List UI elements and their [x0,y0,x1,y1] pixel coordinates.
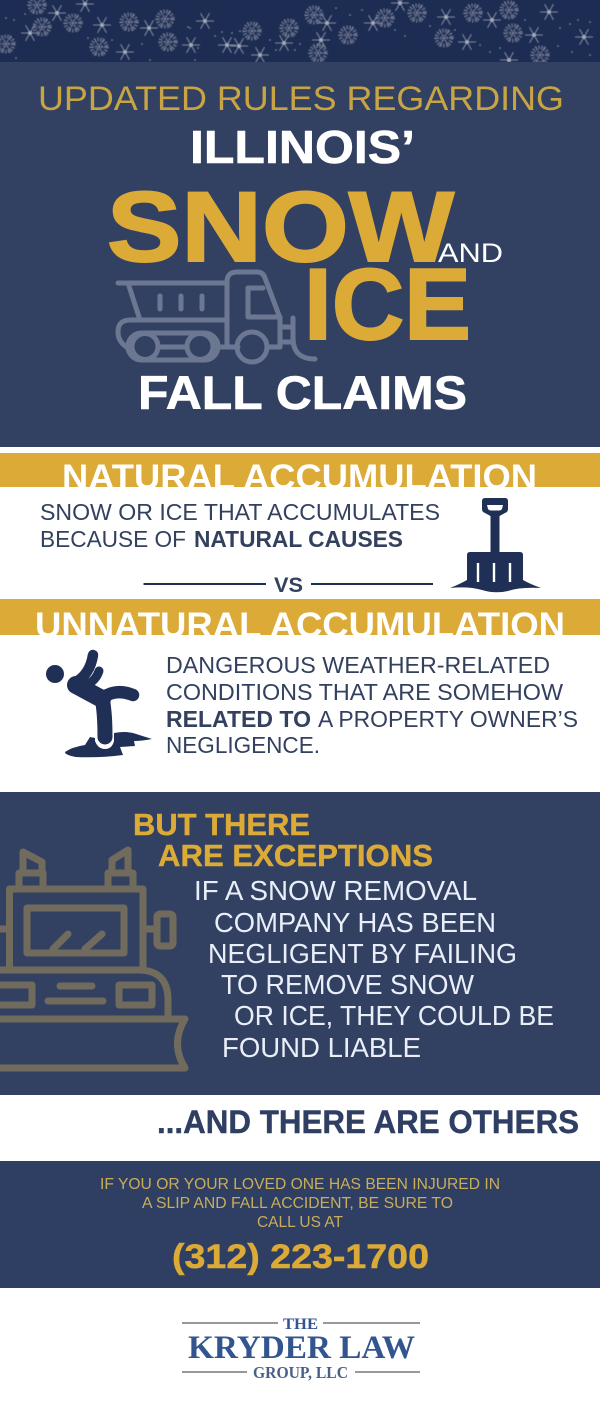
heading: fall claims: FALL CLAIMS [138,366,467,419]
logo: the kryder law group: THE [283,1316,318,1333]
vs divider: VS [274,574,303,597]
heading: and there are others: ...AND THERE ARE OTHERS [157,1104,579,1140]
text: exception explanation: OR ICE, THEY COULD BE [234,1000,554,1031]
icon: bulldozer front view [0,850,185,1068]
text: exception explanation: FOUND LIABLE [222,1032,421,1063]
heading: Illinois': ILLINOIS’ [190,121,415,173]
text: exception explanation: IF A SNOW REMOVAL [194,875,477,906]
text: unnatural accumulation definition: A PROPERTY OWNER’S [318,706,578,732]
banner: natural accumulation: NATURAL ACCUMULATION [62,458,537,497]
heading: snow: SNOW [107,171,455,282]
text: call to action: CALL US AT [257,1214,343,1231]
text: natural accumulation definition: NATURAL CAUSES [194,526,403,552]
text: natural accumulation definition: SNOW OR ICE THAT ACCUMULATES [40,499,440,525]
heading: updated rules regarding: UPDATED RULES REGARDING [38,80,564,118]
text: exception explanation: COMPANY HAS BEEN [214,907,496,938]
panel: title [0,62,600,447]
text: exception explanation [194,875,554,1063]
text: natural accumulation definition [40,499,440,552]
text: unnatural accumulation definition: RELATED TO [166,706,311,732]
heading: but there are exceptions [133,808,433,873]
panel: exceptions [0,792,600,1095]
text: call to action: A SLIP AND FALL ACCIDENT, BE SURE TO [142,1195,453,1212]
icon: shovel in snow [450,498,541,592]
heading: and: AND [438,238,503,268]
phone number: (312) 223-1700 [172,1238,429,1276]
text: unnatural accumulation definition: NEGLIGENCE. [166,732,320,758]
text: unnatural accumulation definition: DANGEROUS WEATHER-RELATED [166,652,550,678]
text: exception explanation: TO REMOVE SNOW [221,969,475,1000]
banner: unnatural accumulation: UNNATURAL ACCUMULATION [35,606,565,645]
heading: but there are exceptions: BUT THERE [133,808,310,842]
heading: ice: ICE [304,249,471,361]
banner: natural accumulation [0,453,600,497]
logo: the kryder law group [182,1316,420,1382]
text: natural accumulation definition: BECAUSE OF [40,526,186,552]
text: call to action [100,1176,500,1231]
heading: but there are exceptions: ARE EXCEPTIONS [158,839,433,873]
text: call to action: IF YOU OR YOUR LOVED ONE HAS BEEN INJURED IN [100,1176,500,1193]
text: exception explanation: NEGLIGENT BY FAILING [208,938,517,969]
logo: the kryder law group: GROUP, LLC [253,1363,348,1382]
panel: call to action [0,1161,600,1288]
icon: person slipping on ice [46,655,152,757]
text: unnatural accumulation definition: CONDITIONS THAT ARE SOMEHOW [166,679,563,705]
snowflake banner [0,0,600,68]
icon: snow plow truck [118,272,315,362]
logo: the kryder law group: KRYDER LAW [188,1330,415,1366]
text: unnatural accumulation definition [166,652,578,758]
